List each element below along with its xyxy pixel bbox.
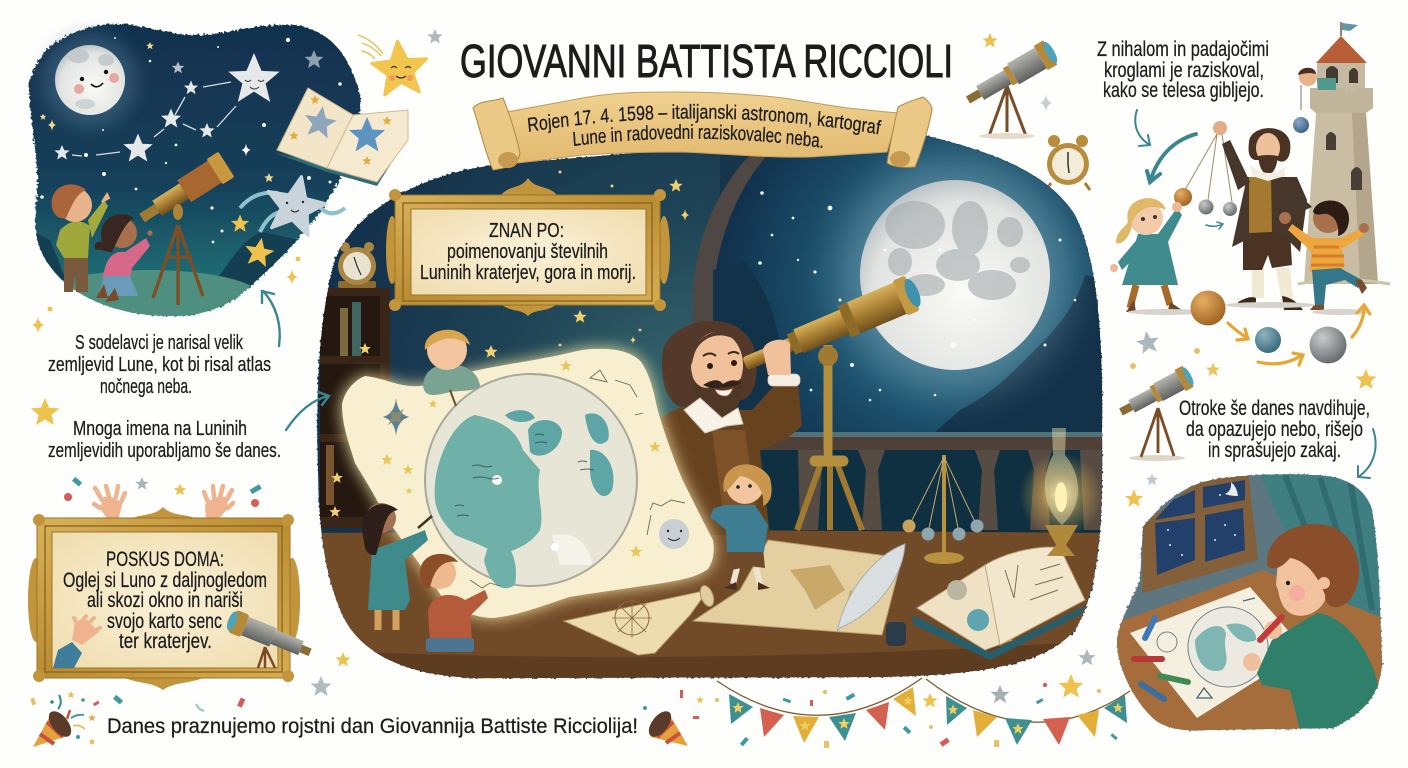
small star sketches on the map: [381, 360, 661, 557]
wooden table: [310, 530, 1110, 690]
frame telescope: [224, 608, 315, 668]
icon: smiling moon: [42, 32, 138, 128]
drawing paper: [1130, 587, 1305, 718]
panel: tower with falling ball experiment: [1110, 22, 1390, 365]
compass rose: [382, 398, 410, 436]
boy pointing at the sky: [52, 184, 109, 292]
text: pendulum research: [1097, 38, 1269, 102]
drawn Moon: [1157, 598, 1280, 698]
info frame: try at home: ter kraterjev.: [119, 630, 212, 653]
banner scroll with birth details: [472, 92, 932, 170]
text: pendulum research: kako se telesa gibljejo.: [1103, 79, 1264, 102]
constellation of star characters: [40, 37, 342, 243]
window with night sky: [1142, 470, 1258, 593]
bunting flags: [717, 678, 1130, 745]
Riccioli with pendulum: [1213, 121, 1312, 310]
title: GIOVANNI BATTISTA RICCIOLI: [460, 35, 953, 87]
boy kneeling and drawing: [420, 554, 488, 652]
stars in the window: [758, 191, 1076, 401]
tripod of big telescope: [797, 345, 862, 530]
blond child peeking over the map: [423, 330, 480, 406]
window arch: [693, 156, 766, 324]
decorative stars and confetti bottom centre: [311, 649, 1118, 748]
rolled chart with compass: [564, 584, 716, 655]
text: map of the Moon: nočnega neba.: [100, 376, 192, 398]
tower: [1298, 22, 1390, 284]
girl kneeling at the telescope: [95, 214, 153, 302]
crayons: [1134, 618, 1188, 699]
gold stars near the sky panel: [231, 214, 300, 285]
panel: central observatory scene: [310, 120, 1110, 690]
text: map of the Moon: [48, 332, 271, 398]
text: names still used: Mnoga imena na Luninih: [73, 418, 247, 440]
oil lamp: [1019, 428, 1103, 556]
decorative stars left: [31, 306, 59, 425]
text: names still used: zemljevidih uporabljamo še danes.: [48, 440, 281, 462]
info frame: known for: ZNAN PO:: [489, 220, 564, 242]
glowing moon map scroll: [342, 349, 714, 618]
icon: brass telescope on tripod: [134, 152, 234, 305]
info frame: try at home: Oglej si Luno z daljnogledom: [63, 569, 267, 592]
text: pendulum research: Z nihalom in padajočimi: [1097, 38, 1269, 61]
text: map of the Moon: S sodelavci je narisal velik: [75, 332, 244, 354]
icon: alarm clock: [1046, 135, 1090, 190]
info frame: try at home: svojo karto senc: [107, 610, 222, 633]
raised hand holding the telescope: [763, 340, 791, 375]
boy: [1243, 524, 1378, 730]
hanging pendulum: [1174, 134, 1237, 216]
decorative stars right: [1125, 329, 1376, 507]
girl drawing on the map: [362, 503, 432, 630]
panel: boy drawing a Moon map: [1116, 473, 1384, 732]
icon: telescope right side: [1115, 364, 1196, 461]
text: names still used: [48, 418, 281, 462]
waving child's arm: [53, 616, 100, 668]
arrow to child scene: [1358, 429, 1376, 478]
desk pendulum: [902, 455, 984, 564]
quill and ink: [837, 544, 906, 646]
large full moon: [837, 157, 1073, 393]
mantel clock: [338, 242, 376, 288]
wooden desk: [1117, 570, 1382, 730]
info frame: try at home: ali skozi okno in nariši: [87, 589, 243, 612]
info frame: known for: [386, 178, 670, 316]
child on the map in blue coat: [710, 464, 772, 590]
confetti left: [30, 691, 245, 744]
info frame: try at home: [28, 507, 315, 690]
text: pendulum research: kroglami je raziskoval,: [1104, 59, 1264, 82]
big brass telescope: [743, 276, 921, 370]
party horn left: [33, 707, 76, 747]
experiment balls with orange arrows: [1128, 290, 1370, 365]
text: inspires children: in sprašujejo zakaj.: [1208, 439, 1341, 462]
floating gold stars: [329, 170, 724, 649]
astronomer Riccioli: [660, 321, 802, 535]
night sky through the window: [713, 120, 1110, 440]
mountains through the window: [713, 262, 1105, 432]
banner scroll with birth details: Rojen 17. 4. 1598 – italijanski astronom, kartograf: [528, 104, 882, 135]
panel: night sky scene top left: [29, 24, 361, 330]
small smiling moon: [659, 519, 689, 549]
boy with striped jumper: [1279, 201, 1369, 310]
banner scroll with birth details: Lune in radovedni raziskovalec neba.: [573, 124, 822, 148]
icon: open star book: [275, 88, 408, 186]
bookshelf: [320, 288, 390, 528]
arrows pointing to pendulum: [1135, 110, 1223, 229]
text: inspires children: [1179, 397, 1370, 462]
icon: flying smiling star: [240, 171, 345, 238]
world map sheet: [693, 540, 902, 635]
girl with ball: [1110, 198, 1182, 312]
text: birthday line: Danes praznujemo rojstni dan Giovannija Battiste Ricciolija!: [107, 715, 638, 738]
text: map of the Moon: zemljevid Lune, kot bi risal atlas: [48, 354, 271, 376]
teal arrows left: [262, 291, 329, 430]
confetti and hands above frame: [64, 477, 262, 520]
open research book: [912, 547, 1086, 660]
icon: telescope top right: [961, 33, 1061, 139]
info frame: try at home: POSKUS DOMA:: [106, 548, 224, 571]
icon: big smiling star: [358, 29, 443, 96]
party horn right: [643, 690, 704, 746]
info frame: known for: poimenovanju številnih: [447, 241, 608, 263]
child dropping a ball from the tower: [1293, 68, 1336, 133]
balcony railing: [745, 432, 1105, 538]
info frame: known for: Luninih kraterjev, gora in morij.: [420, 262, 636, 284]
map moon globe: [425, 374, 637, 588]
